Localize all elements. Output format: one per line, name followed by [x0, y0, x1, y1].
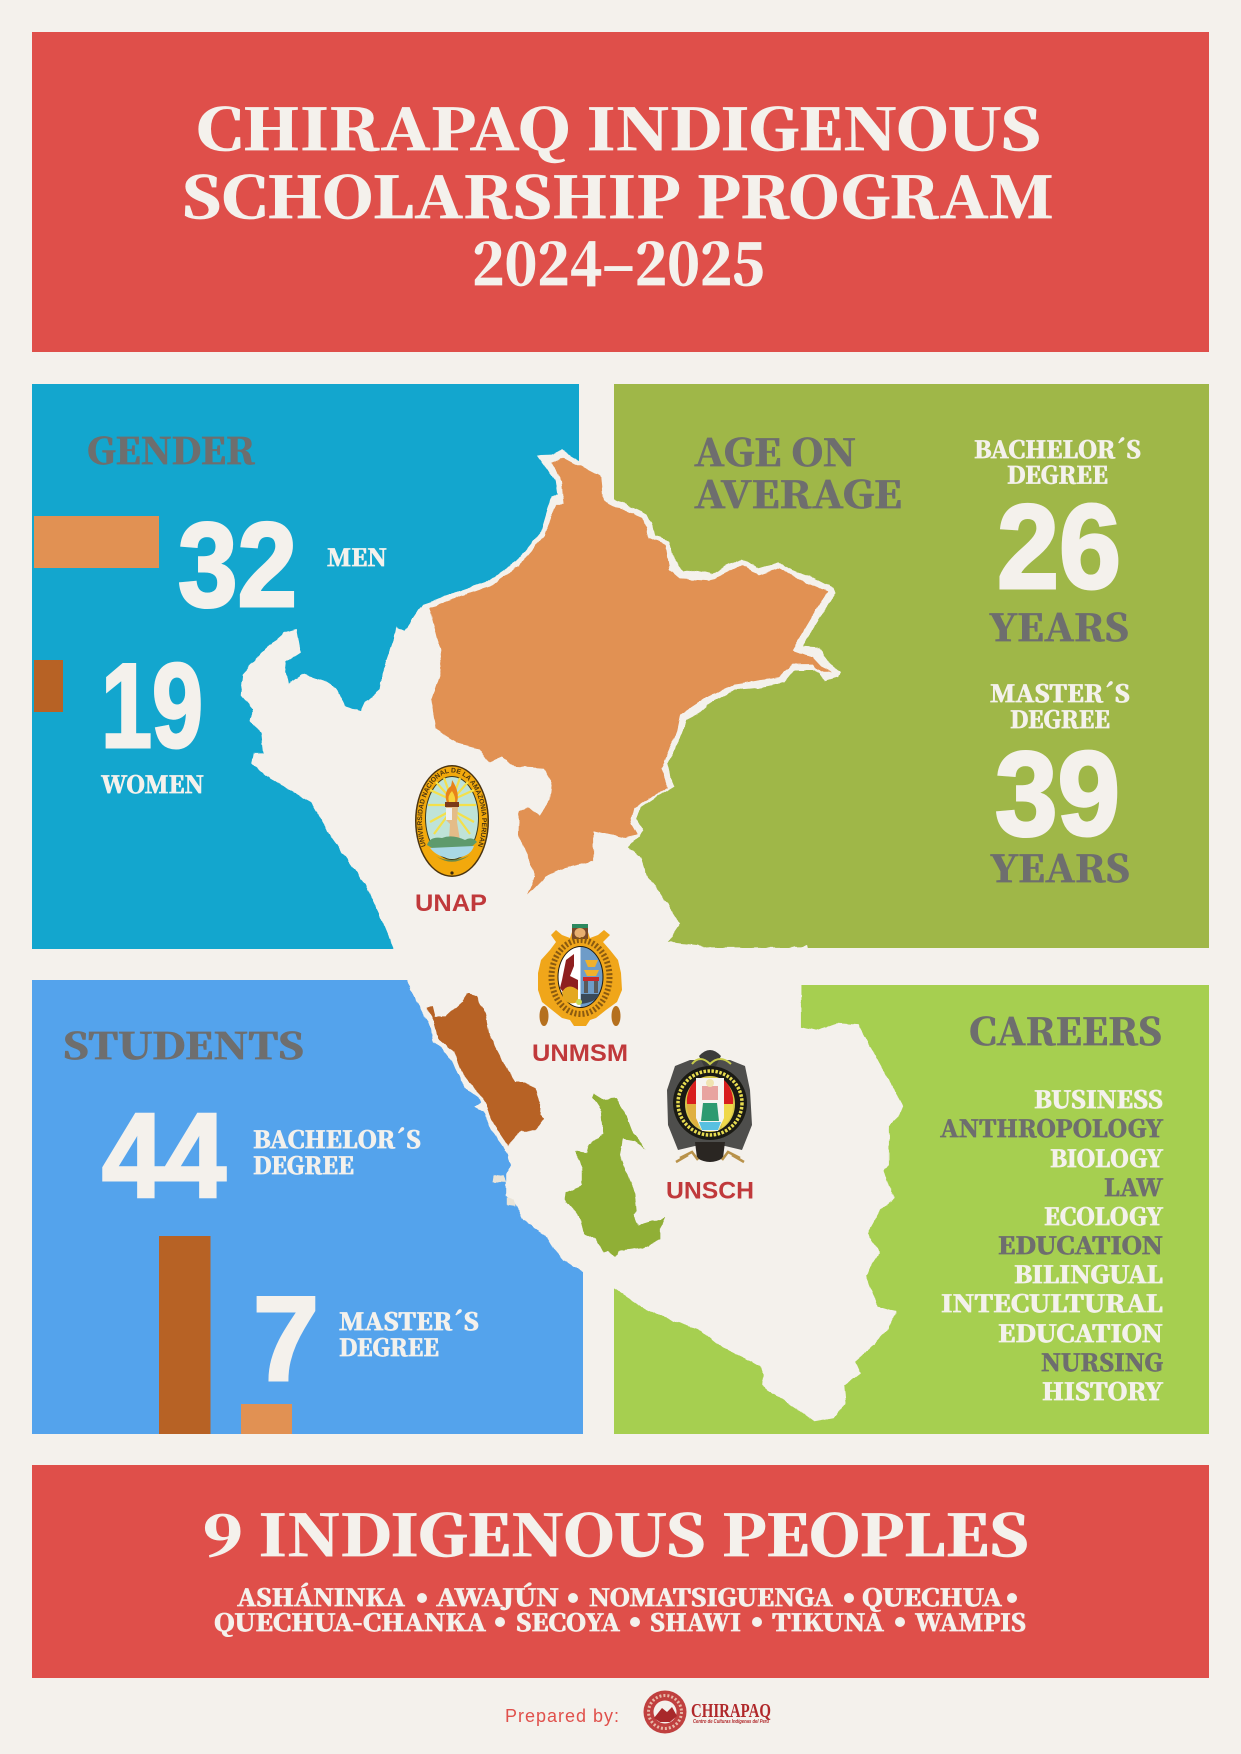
number: 44: 44 — [102, 1089, 226, 1223]
career list: NURSING — [1041, 1344, 1163, 1378]
emblem: UNAP: UNIVERSIDAD NACIONAL DE LA AMAZONIA PERUANA — [417, 768, 487, 848]
career list: ANTHROPOLOGY — [940, 1110, 1163, 1144]
label: years: YEARS — [989, 598, 1129, 652]
panel: careers — [614, 985, 1209, 1434]
career list: EDUCATION — [998, 1227, 1163, 1261]
peoples list line 2: SECOYA — [516, 1604, 620, 1638]
emblem: UNAP — [415, 765, 489, 877]
label: years: YEARS — [990, 839, 1130, 893]
peoples list line 2: WAMPIS — [915, 1604, 1026, 1638]
label: degree: DEGREE — [1010, 701, 1110, 735]
label: bachelor degree: BACHELOR´S — [974, 431, 1141, 465]
peoples list line 2: QUECHUA-CHANKA — [214, 1604, 486, 1638]
peoples list line 2: TIKUNA — [772, 1604, 884, 1638]
career list: EDUCATION — [998, 1315, 1163, 1349]
peoples list line 1: QUECHUA — [862, 1579, 1002, 1613]
bar: men — [34, 516, 159, 568]
career list: HISTORY — [1042, 1373, 1163, 1407]
label: master degree: MASTER´S — [990, 675, 1130, 709]
panel: age on average — [614, 384, 1209, 948]
heading: 9 indigenous peoples: 9 INDIGENOUS PEOPLES — [203, 1491, 1029, 1573]
title banner — [32, 32, 1209, 352]
logo: Chirapaq: CHIRAPAQ — [691, 1700, 771, 1722]
emblem: UNMSM — [538, 924, 622, 1026]
peoples list line 1: AWAJÚN — [436, 1579, 559, 1613]
peoples list line 2 — [214, 1604, 1026, 1638]
label: men: MEN — [327, 539, 387, 573]
footer: prepared by: Prepared by: — [505, 1706, 619, 1726]
logo: Chirapaq — [644, 1690, 771, 1734]
peoples list line 2: SHAWI — [650, 1604, 741, 1638]
age heading: AGE ON — [694, 423, 856, 477]
peoples list line 1 — [237, 1579, 1016, 1613]
region: Lima — [426, 994, 544, 1145]
islands — [492, 1175, 515, 1206]
title years: 2024–2025 — [472, 220, 765, 302]
banner: indigenous peoples — [32, 1465, 1209, 1678]
panel: gender — [32, 384, 579, 949]
career list: BIOLOGY — [1050, 1140, 1163, 1174]
number: 39: 39 — [995, 727, 1120, 861]
emblem: UNSCH — [667, 1050, 752, 1162]
label: degree: DEGREE — [1007, 456, 1108, 490]
career list: INTECULTURAL — [941, 1285, 1163, 1319]
label: UNAP: UNAP — [415, 890, 487, 917]
label: bachelor degree: BACHELOR´S — [253, 1121, 421, 1155]
bar: bachelor — [159, 1236, 210, 1434]
students heading: STUDENTS — [63, 1019, 304, 1070]
title line 1: CHIRAPAQ INDIGENOUS — [196, 85, 1041, 167]
panel: students — [32, 980, 583, 1434]
label: UNMSM: UNMSM — [532, 1040, 628, 1067]
bar: master — [241, 1404, 292, 1434]
label: women: WOMEN — [101, 766, 204, 800]
label: UNSCH: UNSCH — [666, 1178, 754, 1204]
land: northern part — [241, 450, 840, 956]
land: southern part — [407, 977, 903, 1422]
title line 2: SCHOLARSHIP PROGRAM — [182, 153, 1054, 235]
peoples list line 1: ASHÁNINKA — [237, 1579, 405, 1613]
map land and regions — [241, 450, 903, 1422]
peoples list line 1: NOMATSIGUENGA — [589, 1579, 833, 1613]
career list: BILINGUAL — [1014, 1256, 1163, 1290]
careers heading: CAREERS — [969, 1002, 1162, 1056]
number: 26: 26 — [997, 480, 1121, 614]
map of Peru — [240, 449, 904, 1422]
logo: Chirapaq: Centro de Culturas Indígenas del Perú — [693, 1719, 769, 1725]
label: degree: DEGREE — [339, 1329, 439, 1363]
age heading line 2: AVERAGE — [694, 465, 902, 519]
career list: LAW — [1104, 1169, 1164, 1203]
label: master degree: MASTER´S — [339, 1303, 479, 1337]
region: Ayacucho — [565, 1094, 666, 1257]
number: 7: 7 — [253, 1272, 319, 1406]
career list: BUSINESS — [1034, 1081, 1163, 1115]
region: Loreto — [429, 457, 831, 895]
label: degree: DEGREE — [253, 1147, 354, 1181]
career list: ECOLOGY — [1044, 1198, 1163, 1232]
number: 19 women: 19 — [101, 639, 203, 773]
bar: women — [34, 660, 63, 712]
number: 32 men: 32 — [178, 498, 297, 632]
gender heading: GENDER — [87, 424, 255, 475]
career list — [940, 1081, 1164, 1407]
